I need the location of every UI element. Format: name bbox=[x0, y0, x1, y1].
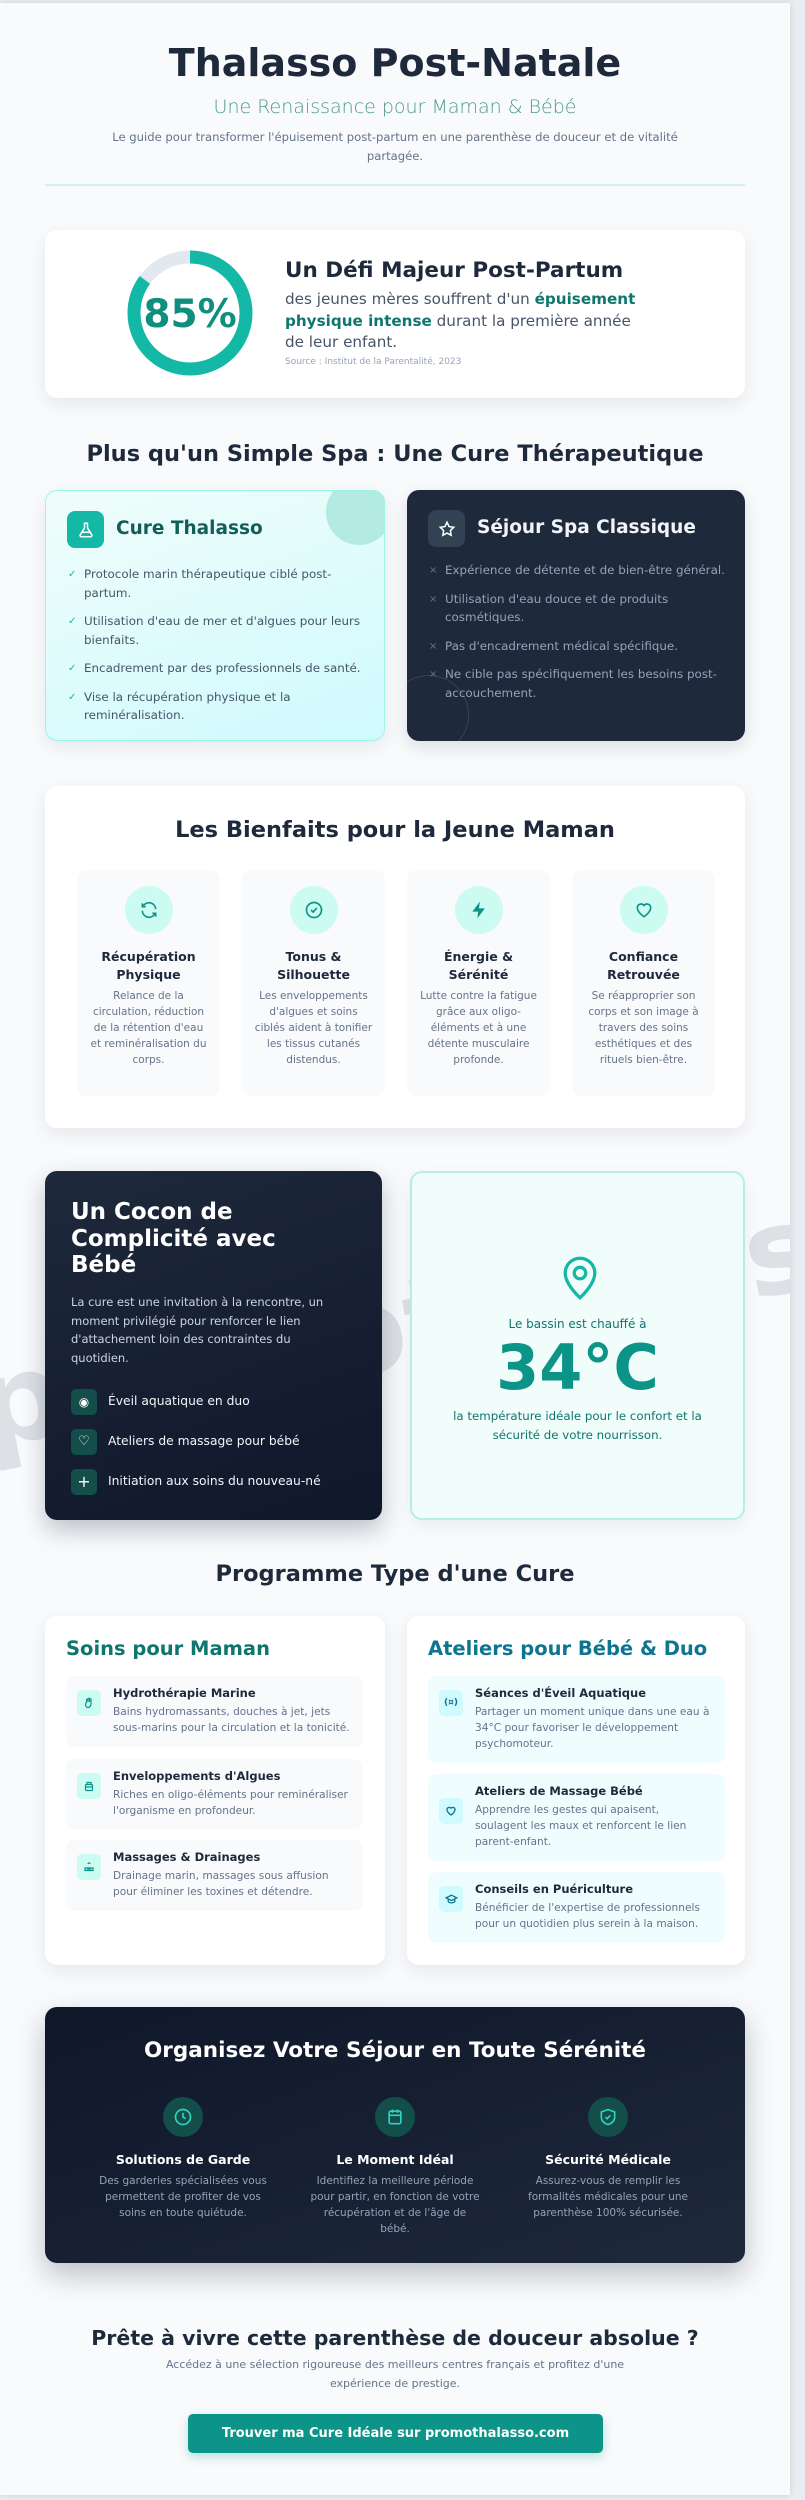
list: × bbox=[429, 640, 437, 652]
benefit: energie bbox=[407, 870, 550, 1096]
list bbox=[429, 563, 725, 700]
list: Expérience de détente et de bien-être général. bbox=[445, 563, 725, 577]
benefit: recuperation: Récupération bbox=[101, 949, 196, 964]
benefit: tonus: Silhouette bbox=[277, 967, 350, 982]
item: garde: Solutions de Garde bbox=[116, 2152, 250, 2167]
benefit: tonus: Les enveloppements d'algues et soins ciblés aident à tonifier les tissus cutanés distendus. bbox=[255, 990, 372, 1066]
list: × bbox=[429, 594, 437, 604]
item: enveloppements: Enveloppements d'Algues bbox=[113, 1769, 280, 1783]
panel: organisation bbox=[45, 2007, 745, 2263]
list: Ne cible pas spécifiquement les besoins post-accouchement. bbox=[445, 667, 717, 700]
source: Source : Institut de la Parentalité, 2023 bbox=[285, 357, 461, 367]
benefit: recuperation: Relance de la circulation, réduction de la rétention d'eau et reminéralisation du corps. bbox=[90, 990, 206, 1066]
list: ✓ bbox=[68, 692, 76, 702]
heading: Ateliers pour Bébé & Duo bbox=[428, 1637, 707, 1660]
heading: programme: Programme Type d'une Cure bbox=[216, 1561, 574, 1587]
item: securite: Assurez-vous de remplir les formalités médicales pour une parenthèse 100% sécurisée. bbox=[528, 2175, 688, 2219]
list: Encadrement par des professionnels de santé. bbox=[84, 661, 361, 675]
list: Pas d'encadrement médical spécifique. bbox=[445, 638, 678, 652]
list: × bbox=[429, 669, 437, 680]
list: Utilisation d'eau douce et de produits cosmétiques. bbox=[445, 592, 668, 624]
heading: Soins pour Maman bbox=[66, 1637, 270, 1660]
benefit: energie: Énergie & bbox=[444, 949, 513, 964]
item: puericulture bbox=[428, 1872, 725, 1943]
chart: donut 85%: 85% bbox=[143, 292, 237, 337]
benefit: energie: Sérénité bbox=[449, 967, 508, 982]
item: moment: Identifiez la meilleure période pour partir, en fonction de votre récupération et de l'âge de bébé. bbox=[310, 2175, 480, 2235]
benefit: energie: Lutte contre la fatigue grâce aux oligo-éléments et à une détente musculaire profonde. bbox=[420, 990, 537, 1066]
item: puericulture: Bénéficier de l'expertise de professionnels pour un quotidien plus serein à la maison. bbox=[475, 1902, 700, 1930]
intro text: Le guide pour transformer l'épuisement post-partum en une parenthèse de douceur et de vitalité partagée. bbox=[112, 130, 678, 163]
heading: comparison: Plus qu'un Simple Spa : Une Cure Thérapeutique bbox=[86, 441, 704, 467]
list: Protocole marin thérapeutique ciblé post-partum. bbox=[84, 567, 331, 600]
item: soins: + bbox=[77, 1472, 91, 1491]
item: eveil aquatique: Séances d'Éveil Aquatique bbox=[475, 1686, 646, 1700]
item: soins: Initiation aux soins du nouveau-né bbox=[108, 1474, 321, 1488]
cta button bbox=[188, 2414, 603, 2453]
text: Le bassin est chauffé à bbox=[508, 1317, 647, 1331]
item: eveil: ◉ bbox=[79, 1395, 89, 1409]
item: garde bbox=[99, 2097, 267, 2219]
list: × bbox=[429, 565, 437, 576]
item: soins bbox=[71, 1469, 321, 1495]
item: securite bbox=[528, 2097, 688, 2219]
list: Utilisation d'eau de mer et d'algues pour leurs bienfaits. bbox=[84, 614, 360, 646]
benefit: confiance: Retrouvée bbox=[607, 967, 680, 982]
icon: pin bbox=[564, 1256, 596, 1300]
heading: Cure Thalasso bbox=[116, 518, 263, 539]
list: ✓ bbox=[68, 569, 76, 580]
item: massages: Massages & Drainages bbox=[113, 1850, 260, 1864]
benefit: recuperation: Physique bbox=[116, 967, 181, 982]
benefit: confiance: Se réapproprier son corps et son image à travers des soins esthétiques et des rituels bien-être. bbox=[588, 990, 699, 1066]
subtitle: Une Renaissance pour Maman & Bébé bbox=[214, 96, 576, 118]
heading: Organisez Votre Séjour en Toute Sérénité bbox=[144, 2038, 646, 2063]
heading: Les Bienfaits pour la Jeune Maman bbox=[175, 817, 615, 843]
heading: Séjour Spa Classique bbox=[477, 517, 696, 538]
item: moment: Le Moment Idéal bbox=[336, 2152, 454, 2167]
item: garde: Des garderies spécialisées vous permettent de profiter de vos soins en toute quiétude. bbox=[99, 2175, 267, 2219]
item: massage bbox=[71, 1429, 300, 1455]
benefit: confiance: Confiance bbox=[609, 949, 678, 964]
item: eveil aquatique: Partager un moment unique dans une eau à 34°C pour favoriser le développement psychomoteur. bbox=[475, 1706, 709, 1750]
panel: cure thalasso bbox=[45, 490, 385, 741]
big number: 34°C bbox=[496, 1331, 659, 1404]
item: massage bebe bbox=[428, 1774, 725, 1861]
item: massage bebe: Apprendre les gestes qui apaisent, soulagent les maux et renforcent le lien parent-enfant. bbox=[475, 1804, 686, 1848]
item: enveloppements: Riches en oligo-éléments pour reminéraliser l'organisme en profondeur. bbox=[113, 1789, 348, 1817]
panel: stat card bbox=[45, 230, 745, 398]
heading: Complicité avec bbox=[71, 1226, 276, 1252]
item: massage: ♡ bbox=[78, 1434, 90, 1449]
heading: Un Cocon de bbox=[71, 1199, 233, 1225]
item: massage: Ateliers de massage pour bébé bbox=[108, 1434, 300, 1448]
panel: soins maman bbox=[45, 1616, 385, 1965]
stat heading: Un Défi Majeur Post-Partum bbox=[285, 258, 623, 283]
panel: temperature bbox=[410, 1171, 745, 1520]
item: hydrotherapie bbox=[66, 1676, 363, 1747]
stat text: des jeunes mères souffrent d'un épuisement physique intense durant la première année de leur enfant. bbox=[285, 290, 635, 351]
cta text: Accédez à une sélection rigoureuse des meilleurs centres français et profitez d'une expérience de prestige. bbox=[166, 2358, 624, 2390]
cta heading: Prête à vivre cette parenthèse de douceur absolue ? bbox=[91, 2326, 699, 2350]
caption: la température idéale pour le confort et la sécurité de votre nourrisson. bbox=[453, 1409, 702, 1442]
text: La cure est une invitation à la rencontre, un moment privilégié pour renforcer le lien d'attachement loin des contraintes du quotidien. bbox=[71, 1295, 323, 1365]
item: hydrotherapie: Bains hydromassants, douches à jet, jets sous-marins pour la circulation et la tonicité. bbox=[113, 1706, 350, 1734]
item: securite: Sécurité Médicale bbox=[545, 2152, 671, 2167]
item: hydrotherapie: Hydrothérapie Marine bbox=[113, 1686, 256, 1700]
heading: Bébé bbox=[71, 1252, 136, 1278]
icon: star bbox=[428, 510, 465, 547]
title: Thalasso Post-Natale bbox=[169, 41, 621, 85]
item: eveil aquatique bbox=[428, 1676, 725, 1763]
item: eveil bbox=[71, 1389, 250, 1415]
item: moment bbox=[310, 2097, 480, 2235]
benefit: recuperation bbox=[77, 870, 220, 1096]
list: Vise la récupération physique et la reminéralisation. bbox=[84, 690, 291, 722]
heading bbox=[71, 1199, 276, 1278]
item: eveil: Éveil aquatique en duo bbox=[108, 1394, 250, 1408]
list bbox=[68, 567, 361, 722]
item: massage bebe: Ateliers de Massage Bébé bbox=[475, 1784, 643, 1798]
cta button: Trouver ma Cure Idéale sur promothalasso.com bbox=[222, 2426, 569, 2441]
panel: cocon bbox=[45, 1171, 382, 1520]
item: eveil aquatique: (¤) bbox=[444, 1698, 458, 1708]
item: massages: Drainage marin, massages sous affusion pour éliminer les toxines et détendre. bbox=[113, 1870, 329, 1898]
benefit: tonus: Tonus & bbox=[286, 949, 341, 964]
panel: benefits bbox=[45, 786, 745, 1128]
chart: donut 85% bbox=[128, 250, 252, 376]
panel: spa classique bbox=[407, 490, 745, 741]
item: massages bbox=[66, 1840, 363, 1911]
list: ✓ bbox=[68, 616, 76, 627]
panel: ateliers bebe bbox=[407, 1616, 745, 1965]
benefit: tonus bbox=[242, 870, 385, 1096]
benefit: confiance bbox=[572, 870, 715, 1096]
icon: flask bbox=[67, 511, 104, 548]
item: enveloppements bbox=[66, 1759, 363, 1829]
list: ✓ bbox=[68, 663, 76, 674]
item: puericulture: Conseils en Puériculture bbox=[475, 1882, 633, 1896]
